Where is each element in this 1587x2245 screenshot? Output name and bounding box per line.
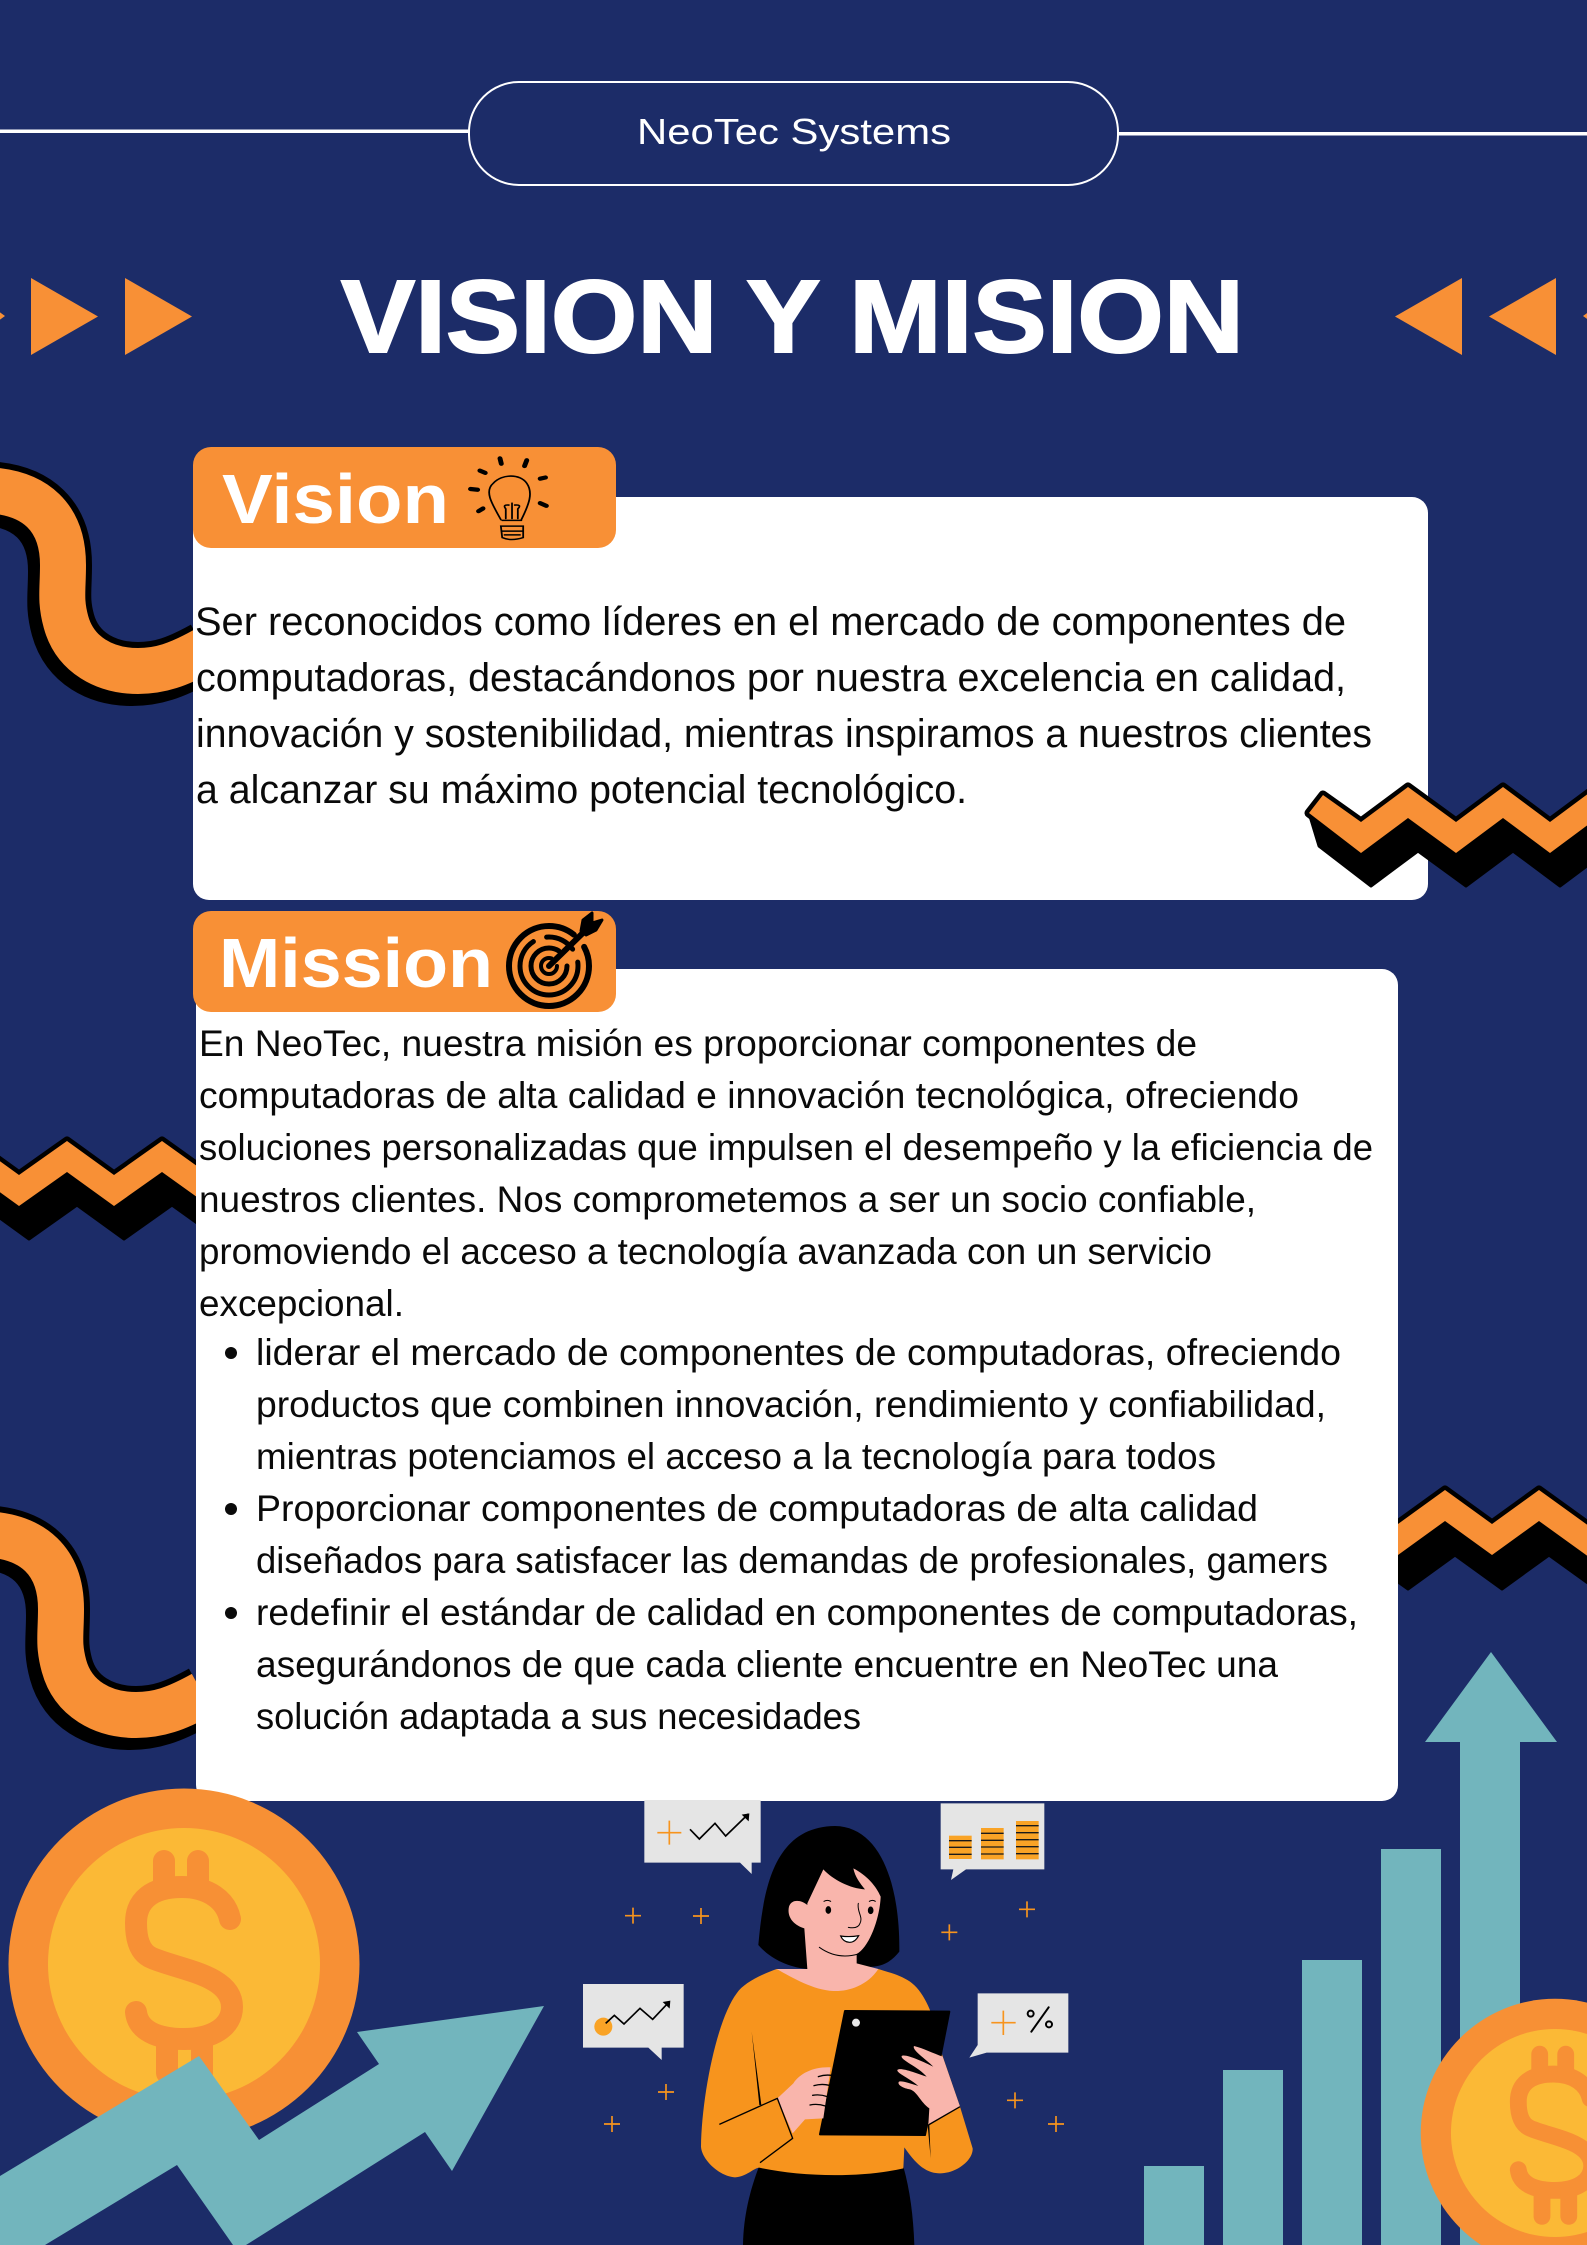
icon: large dollar coin (8, 1788, 360, 2140)
arrow: rising teal zigzag (0, 2006, 544, 2245)
figure: sleeve lines (719, 2032, 960, 2163)
figure: facial features (819, 1900, 875, 1956)
icon: light bulb (471, 458, 546, 540)
heading tab: mission (193, 911, 616, 1012)
figure: left hand (777, 2067, 831, 2133)
text block: vision statement: a alcanzar su máximo potencial tecnológico. (196, 768, 967, 812)
panel: vision card (193, 497, 1428, 900)
header: brand pill with rules (0, 82, 1587, 185)
icon: target with arrow (509, 913, 602, 1006)
title: VISION Y MISION (341, 259, 1244, 374)
speech bubble: trend with dot (583, 1984, 684, 2060)
figure: face and neck (777, 1868, 881, 1991)
decorative plus signs (604, 1901, 1064, 2132)
figure: skirt (743, 2167, 914, 2245)
bullet list (225, 1332, 1358, 1737)
text block: mission statement: En NeoTec, nuestra misión es proporcionar componentes de (199, 1023, 1197, 1064)
speech bubble: stacked bars (941, 1803, 1044, 1880)
panel: mission card (196, 969, 1398, 1801)
icon: left triangles (0, 278, 192, 355)
bullet list: Proporcionar componentes de computadoras de alta calidad (256, 1488, 1258, 1529)
bullet list: mientras potenciamos el acceso a la tecnología para todos (256, 1436, 1216, 1477)
decorative zigzag: right of mission card (1350, 1490, 1587, 1599)
heading tab: vision (193, 447, 616, 548)
bar chart with up arrow (1144, 1652, 1557, 2245)
illustration: woman with tablet and speech bubbles (583, 1800, 1068, 2245)
header: brand pill with rules: NeoTec Systems (637, 111, 951, 152)
text block: vision statement (195, 600, 1372, 812)
heading tab: mission: Mission (219, 924, 493, 1002)
decorative snake: upper left (0, 490, 205, 677)
text block: mission statement: excepcional. (199, 1283, 404, 1324)
text block: vision statement: Ser reconocidos como líderes en el mercado de componentes de (195, 600, 1346, 644)
text block: mission statement (199, 1023, 1373, 1324)
bullet list: liderar el mercado de componentes de computadoras, ofreciendo (256, 1332, 1341, 1373)
text block: mission statement: computadoras de alta calidad e innovación tecnológica, ofreciendo (199, 1075, 1299, 1116)
bullet list: productos que combinen innovación, rendimiento y confiabilidad, (256, 1384, 1326, 1425)
bullet list: redefinir el estándar de calidad en componentes de computadoras, (256, 1592, 1358, 1633)
text block: mission statement: nuestros clientes. Nos comprometemos a ser un socio confiable, (199, 1179, 1256, 1220)
figure: tablet (820, 2011, 949, 2135)
speech bubble: growth chart (644, 1800, 761, 1874)
figure: right hand (897, 2046, 960, 2125)
bullet list: asegurándonos de que cada cliente encuentre en NeoTec una (256, 1644, 1278, 1685)
decorative snake: lower left (0, 1534, 203, 1721)
heading tab: vision: Vision (222, 460, 449, 538)
decorative zigzag: middle left (0, 1141, 225, 1243)
text block: vision statement: innovación y sostenibilidad, mientras inspiramos a nuestros clientes (196, 712, 1372, 756)
icon: small dollar coin (1421, 1999, 1587, 2245)
text block: vision statement: computadoras, destacándonos por nuestra excelencia en calidad, (196, 656, 1346, 700)
bullet list: diseñados para satisfacer las demandas de profesionales, gamers (256, 1540, 1328, 1581)
text block: mission statement: promoviendo el acceso a tecnología avanzada con un servicio (199, 1231, 1212, 1272)
bullet list: solución adaptada a sus necesidades (256, 1696, 861, 1737)
decorative zigzag: over vision card (1309, 787, 1587, 886)
speech bubble: percent (969, 1993, 1068, 2058)
figure: sweater (701, 1969, 973, 2177)
icon: right triangles (1395, 278, 1587, 355)
figure: hair (758, 1826, 899, 1969)
text block: mission statement: soluciones personalizadas que impulsen el desempeño y la eficiencia de (199, 1127, 1373, 1168)
